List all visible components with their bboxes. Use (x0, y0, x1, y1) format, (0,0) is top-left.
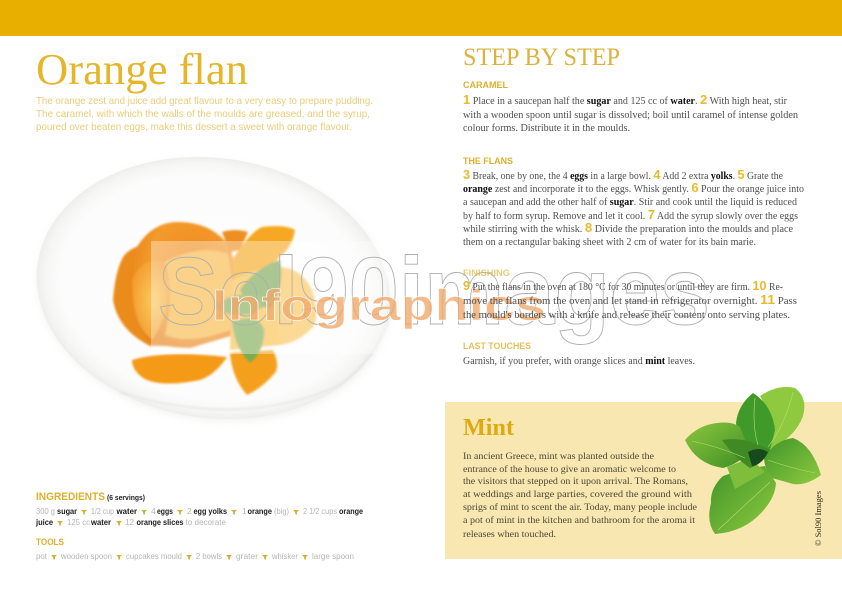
tools list: large spoon (312, 551, 354, 561)
title: Orange flan (36, 45, 248, 94)
tools list: whisker (271, 551, 298, 561)
tools list: pot (36, 551, 48, 561)
mint text: a pot of mint in the kitchen and bathroom for the aroma it (463, 515, 695, 526)
tools list (36, 551, 354, 561)
ingredients list: 125 cc (67, 517, 91, 527)
ingredients list: 4 (151, 506, 156, 516)
section: the flans: 3 Break, one by one, the 4 eggs in a large bowl. 4 Add 2 extra yolks. 5 Grate the (463, 167, 784, 182)
section: caramel: colour forms. Distribute it in the moulds. (463, 123, 630, 134)
mint text: sprigs of mint to scent the air. Today, many people include (463, 502, 698, 513)
section: the flans: while stirring with the whisk. 8 Divide the preparation into the moulds and place (463, 220, 794, 235)
ingredients list: water (116, 507, 138, 516)
ingredients (35, 491, 363, 561)
tools list: wooden spoon (60, 551, 112, 561)
icon: mint leaves (685, 387, 821, 534)
ingredients list: 2 (187, 506, 192, 516)
ingredients heading: INGREDIENTS (36, 491, 105, 503)
section: finishing: FINISHING (463, 268, 510, 279)
ingredients list: 300 g (36, 506, 55, 516)
ingredients list: water (90, 518, 112, 527)
mint text: at weddings and large parties, covered the ground with (463, 489, 692, 500)
section: caramel: with a wooden spoon until sugar is dissolved; boil until caramel of intense golden (463, 110, 798, 121)
section: caramel: CARAMEL (463, 80, 508, 91)
panel: mint (445, 387, 842, 559)
section: last touches (463, 341, 695, 367)
section: the flans: orange zest and incorporate it to the eggs. Whisk gently. 6 Pour the orange juice into (463, 180, 804, 195)
section: the flans: THE FLANS (463, 156, 514, 167)
mint text (463, 451, 698, 540)
plate (20, 135, 407, 443)
ingredients list: orange (248, 507, 272, 516)
section: the flans: by half to form syrup. Remove and let it cool. 7 Add the syrup slowly over the eggs (463, 207, 798, 222)
ingredients list: sugar (57, 507, 78, 516)
section: the flans (463, 156, 804, 248)
section: caramel: 1 Place in a saucepan half the sugar and 125 cc of water. 2 With high heat, stir (463, 92, 788, 107)
intro text: The orange zest and juice add great flavour to a very easy to prepare pudding. (36, 96, 373, 107)
section: the flans: them on a rectangular baking sheet with 2 cm of water for its bain marie. (463, 237, 756, 248)
tools list: grater (236, 551, 258, 561)
mint text: the visitors that stepped on it upon arrival. The Romans, (463, 476, 688, 487)
ingredients list: orange slices (136, 518, 184, 527)
ingredients list: 1 (242, 506, 247, 516)
heading: step by step: STEP BY STEP (463, 44, 620, 71)
ingredients list: egg yolks (194, 507, 227, 516)
ingredients: (6 servings) (107, 493, 145, 502)
orange slices (113, 222, 316, 395)
mint heading: Mint (463, 415, 514, 441)
ingredients list: orange (339, 507, 363, 516)
credit: © Sol90 Images (813, 491, 823, 546)
ingredients list: to decorate (186, 517, 226, 527)
section: the flans: a saucepan and add the other half of sugar. Stir and cook until the liquid is reduced (463, 197, 797, 208)
section: finishing: 9 Put the flans in the oven at 180 °C for 30 minutes or until they are firm. 10 Re- (463, 278, 783, 293)
section: finishing: move the flans from the oven and let stand in refrigerator overnight. 11 Pass (463, 292, 797, 307)
mint text: releases when touched. (463, 529, 556, 540)
section: finishing: the mould's borders with a knife and release their content onto serving plates. (463, 310, 790, 321)
mint text: In ancient Greece, mint was planted outside the (463, 451, 655, 462)
intro text (36, 96, 373, 133)
ingredients list (35, 506, 363, 527)
watermark text: Infographics (212, 281, 546, 330)
ingredients list: 12 (125, 517, 134, 527)
tools list: 2 bowls (196, 551, 222, 561)
top banner (0, 0, 842, 36)
intro text: poured over beaten eggs, make this dessert a sweet with orange flavour. (36, 122, 352, 133)
ingredients list: 2 1/2 cups (303, 506, 337, 516)
intro text: The caramel, with which the walls of the moulds are greased, and the syrup, (36, 109, 370, 120)
ingredients list: eggs (157, 507, 173, 516)
tools list: cupcakes mould (126, 551, 182, 561)
section: caramel (463, 80, 798, 134)
section: finishing (463, 268, 797, 321)
tools heading: TOOLS (36, 537, 65, 548)
ingredients list: juice (35, 518, 53, 527)
photo: plate of orange flan (20, 135, 407, 443)
mint sprig (214, 260, 281, 363)
watermark panel (151, 241, 387, 354)
mint text: entrance of the house to give an aromatic welcome to (463, 464, 676, 475)
ingredients list: 1/2 cup (91, 506, 114, 516)
section: last touches: LAST TOUCHES (463, 341, 532, 352)
section: last touches: Garnish, if you prefer, with orange slices and mint leaves. (463, 356, 695, 367)
ingredients list: (big) (274, 506, 289, 516)
watermark text: Sol90images (158, 238, 710, 345)
